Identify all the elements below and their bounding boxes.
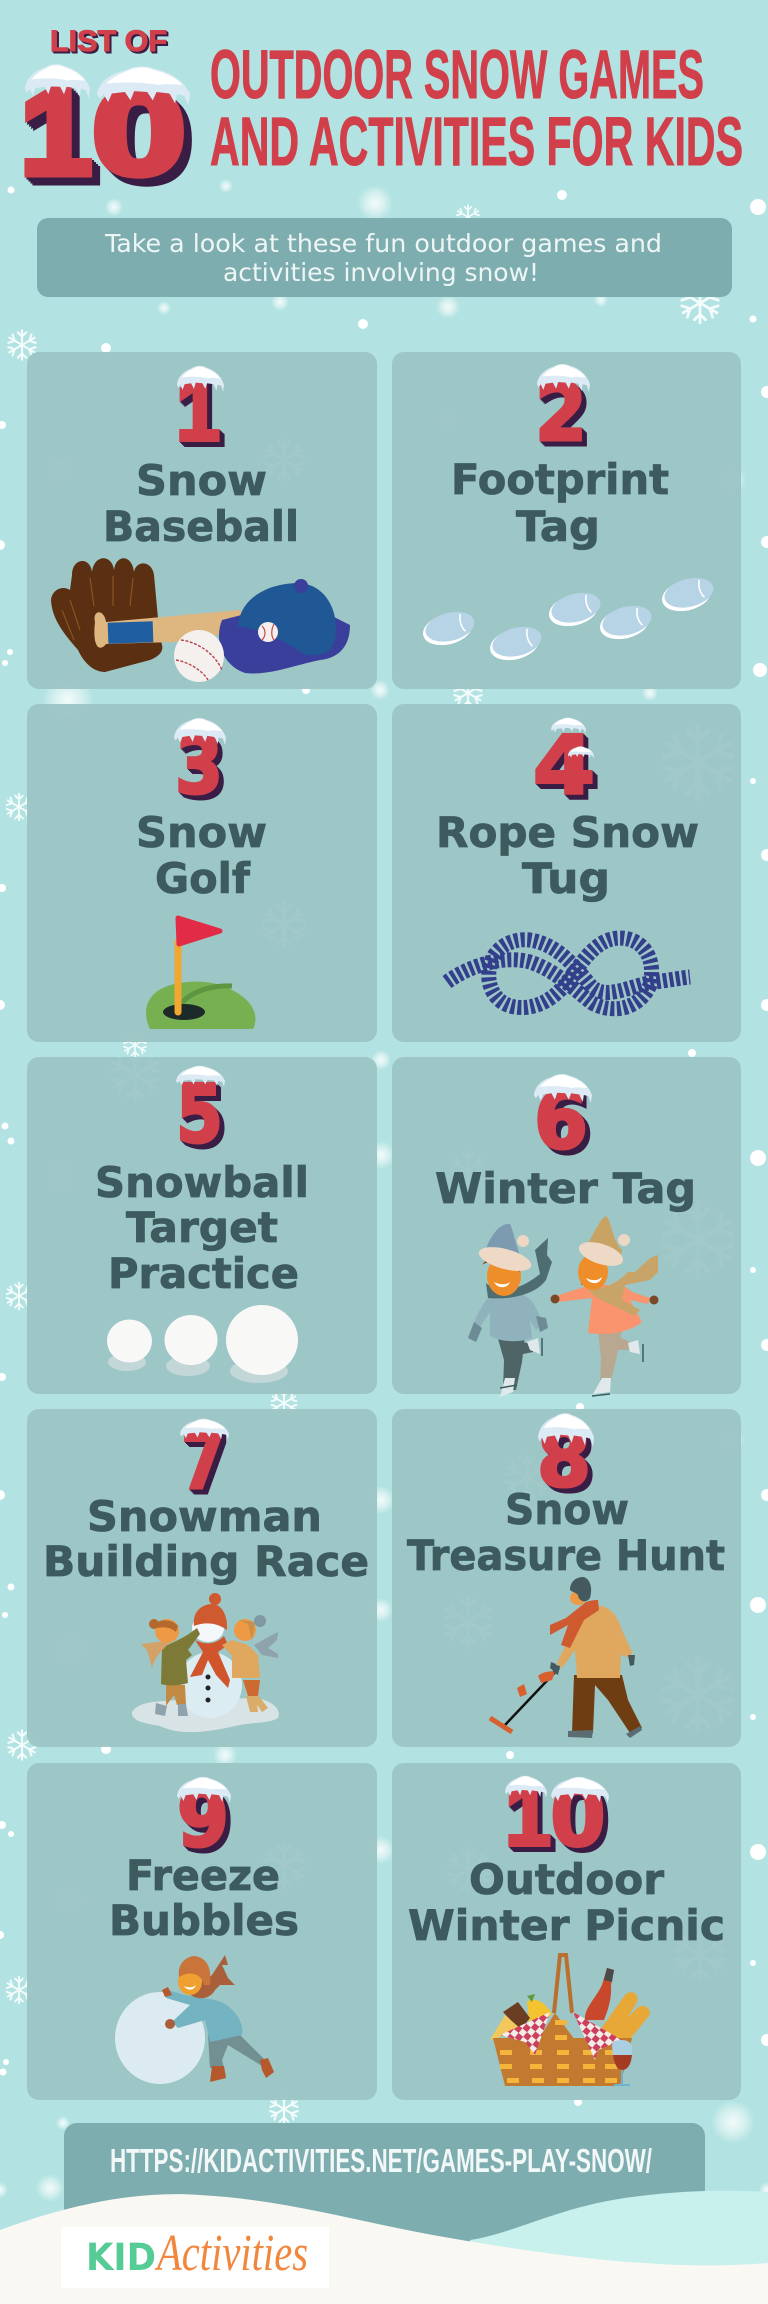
- logo: [61, 2225, 329, 2288]
- heading: [109, 1851, 299, 1945]
- heading: Building Race: [43, 1537, 369, 1586]
- heading: Freeze: [126, 1851, 280, 1900]
- heading: Snowman: [87, 1492, 322, 1541]
- heading: [451, 455, 669, 551]
- heading: [95, 1158, 309, 1298]
- heading: [43, 1492, 369, 1586]
- panel 10: outdoor winter picnic: [408, 1765, 725, 2086]
- title: list of 10 badge: LIST OF: [50, 25, 167, 58]
- number 10: [505, 1765, 609, 1864]
- number 4: 4: [533, 719, 595, 812]
- heading: [408, 1855, 725, 1950]
- heading: Golf: [155, 854, 251, 903]
- icon: person with metal detector: [490, 1577, 642, 1738]
- source link box: [64, 2123, 705, 2243]
- icon: glove, bat, ball and cap: [51, 558, 350, 682]
- panel 6: winter tag: [435, 1074, 696, 1397]
- girl skater: [550, 1216, 658, 1396]
- heading: Baseball: [103, 502, 299, 551]
- heading: [103, 456, 299, 551]
- icon: children building a snowman: [132, 1593, 279, 1732]
- number 6: 6: [534, 1074, 588, 1167]
- number 8: 8: [537, 1412, 591, 1505]
- heading: Tag: [516, 502, 600, 551]
- number 1: 1: [176, 360, 220, 459]
- intro box: [37, 218, 732, 297]
- panel 1: snow baseball: [51, 360, 350, 682]
- panel 3: snow golf: [136, 718, 267, 1029]
- number 10: 1: [505, 1765, 551, 1864]
- number 3: 3: [175, 719, 223, 812]
- title: list of 10 badge: 1: [20, 64, 92, 200]
- icon: golf flag and hole: [146, 918, 255, 1029]
- heading: Bubbles: [109, 1896, 299, 1945]
- panel 8: snow treasure hunt: [407, 1412, 725, 1738]
- panel 2: footprint tag: [419, 364, 717, 665]
- number 2: 2: [535, 366, 587, 459]
- title: list of 10 badge: 0: [92, 64, 186, 200]
- snow hill: front: [0, 2194, 768, 2304]
- heading: Practice: [108, 1249, 299, 1298]
- icon: footprints: [419, 573, 717, 665]
- boy skater: [468, 1224, 552, 1397]
- heading: Snow: [136, 456, 267, 505]
- faint snowflakes inside panels: [112, 439, 732, 1980]
- heading: Treasure Hunt: [407, 1531, 725, 1580]
- heading: Snowball: [95, 1158, 309, 1207]
- number 5: 5: [176, 1068, 223, 1161]
- intro box: activities involving snow!: [223, 258, 539, 287]
- heading: Snow: [136, 808, 267, 857]
- panel 7: snowman building race: [43, 1414, 369, 1732]
- icon: picnic basket: [490, 1955, 650, 2086]
- panel 9: freeze bubbles: [109, 1772, 299, 2084]
- title: list of 10 badge: [20, 25, 190, 200]
- heading: Tug: [522, 854, 610, 903]
- icon: child rolling a snowball: [115, 1955, 274, 2084]
- panel backgrounds: [27, 352, 741, 2100]
- number 10: 0: [551, 1765, 605, 1864]
- intro box: Take a look at these fun outdoor games and: [104, 229, 662, 258]
- heading: Winter Tag: [435, 1164, 696, 1213]
- logo: Activities: [155, 2225, 308, 2282]
- heading: Footprint: [451, 455, 669, 504]
- heading: Target: [126, 1203, 278, 1252]
- icon: three snowballs: [107, 1305, 298, 1383]
- heading: Rope Snow: [436, 808, 699, 857]
- icon: rope knot: [447, 938, 690, 1009]
- number 9: 9: [177, 1772, 229, 1865]
- heading: [407, 1485, 725, 1580]
- logo: KID: [86, 2236, 156, 2279]
- icon: two children skating: [468, 1216, 658, 1397]
- heading: Outdoor: [469, 1855, 664, 1904]
- panel 5: snowball target practice: [95, 1066, 309, 1383]
- heading: [436, 808, 699, 903]
- panel 4: rope snow tug: [436, 718, 699, 1009]
- number 7: 7: [181, 1414, 225, 1507]
- heading: Snow: [505, 1485, 629, 1534]
- heading: [136, 808, 267, 903]
- snow hill: back: [470, 2191, 768, 2304]
- heading: Winter Picnic: [408, 1901, 725, 1950]
- title: headline: [210, 36, 743, 180]
